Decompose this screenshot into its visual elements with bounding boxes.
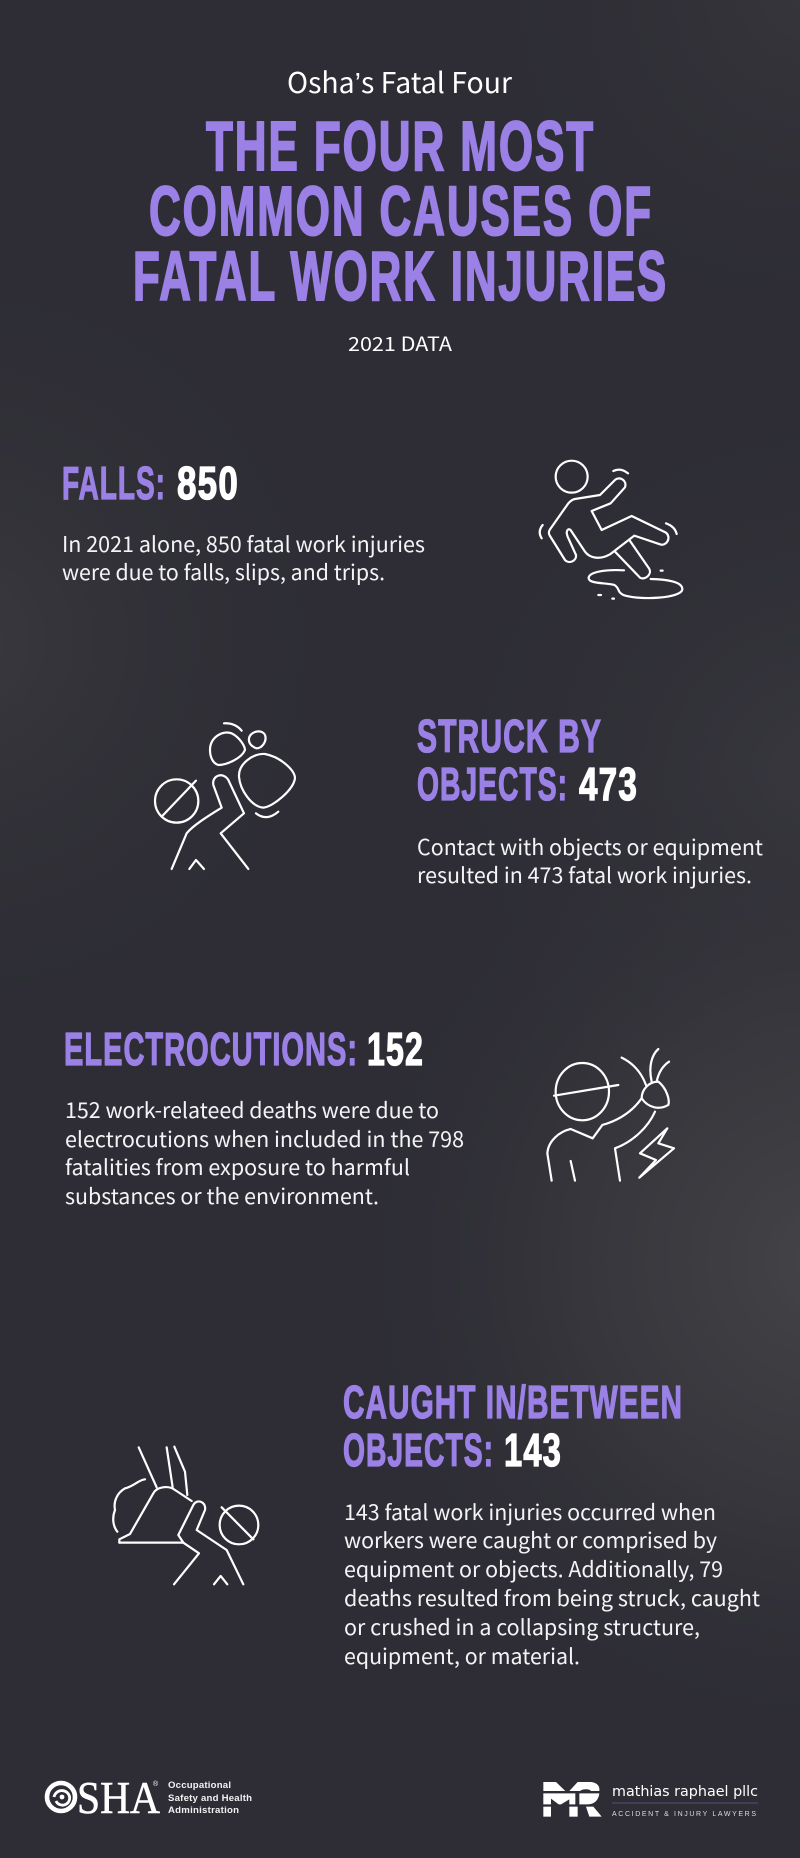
text block: caught in/between objects: workers were caught or comprised by — [344, 1524, 717, 1555]
text block: caught in/between objects: 143 fatal work injuries occurred when — [344, 1496, 716, 1527]
logo: OSHA: Administration — [168, 1805, 239, 1816]
text block: electrocutions: substances or the environment. — [65, 1180, 379, 1211]
text block: electrocutions: fatalities from exposure to harmful — [65, 1151, 410, 1182]
text block: caught in/between objects: equipment or objects. Additionally, 79 — [344, 1553, 723, 1584]
heading: struck by objects 473: 473 — [579, 758, 638, 810]
subtitle: 2021 DATA: 2021 DATA — [348, 328, 452, 357]
panel: falls — [62, 457, 682, 599]
logo: OSHA: ® — [153, 1780, 159, 1788]
eyebrow: Osha's Fatal Four: Osha’s Fatal Four — [287, 61, 513, 102]
icon: person slipping on puddle — [540, 461, 682, 599]
heading: electrocutions 152: 152 — [367, 1023, 424, 1075]
logo: OSHA: Occupational — [168, 1780, 231, 1791]
logo: mathias raphael pllc: ACCIDENT & INJURY LAWYERS — [612, 1811, 756, 1818]
heading: falls 850: 850 — [177, 457, 239, 509]
panel: caught in between objects — [113, 1376, 760, 1671]
text block: caught in/between objects: equipment, or material. — [344, 1640, 580, 1671]
icon: MR monogram — [543, 1782, 602, 1817]
heading: struck by objects 473: OBJECTS: — [417, 758, 568, 810]
logo: OSHA: Safety and Health — [168, 1793, 252, 1804]
heading: caught in/between objects 143 — [343, 1376, 683, 1476]
text block: caught in/between objects: deaths resulted from being struck, caught — [344, 1582, 760, 1613]
panel: struck by objects — [155, 710, 763, 890]
logo: mathias raphael pllc — [543, 1782, 758, 1818]
text block: struck by objects — [417, 831, 763, 890]
text block: falls: were due to falls, slips, and trips. — [62, 556, 385, 587]
icon: worker touching live wires — [547, 1049, 674, 1181]
logo: mathias raphael pllc: mathias raphael pllc — [612, 1784, 758, 1800]
text block: caught in/between objects — [344, 1496, 760, 1671]
text block: electrocutions: electrocutions when included in the 798 — [65, 1123, 464, 1154]
text block: electrocutions — [65, 1094, 464, 1211]
icon: person struck by falling rocks — [155, 723, 295, 869]
icon: person pinned by boulder — [113, 1447, 258, 1584]
heading: struck by objects 473: STRUCK BY — [417, 710, 602, 762]
logo: OSHA: SHA — [77, 1772, 160, 1823]
text block: falls: In 2021 alone, 850 fatal work injuries — [62, 528, 425, 559]
text block: caught in/between objects: or crushed in a collapsing structure, — [344, 1611, 700, 1642]
heading: caught in/between objects 143: OBJECTS: — [343, 1424, 494, 1476]
heading: caught in/between objects 143: 143 — [504, 1424, 562, 1476]
panel: electrocutions — [64, 1023, 674, 1211]
heading: struck by objects 473 — [417, 710, 638, 810]
title — [133, 107, 668, 315]
logo: OSHA — [47, 1772, 252, 1823]
text block: struck by objects: Contact with objects or equipment — [417, 831, 763, 862]
icon: OSHA swirl O — [47, 1783, 75, 1811]
header panel — [133, 61, 668, 357]
heading: falls 850: FALLS: — [62, 457, 166, 509]
text block: falls — [62, 528, 425, 587]
heading: electrocutions 152: ELECTROCUTIONS: — [64, 1023, 358, 1075]
text block: electrocutions: 152 work-relateed deaths were due to — [65, 1094, 439, 1125]
text block: struck by objects: resulted in 473 fatal work injuries. — [417, 859, 752, 890]
